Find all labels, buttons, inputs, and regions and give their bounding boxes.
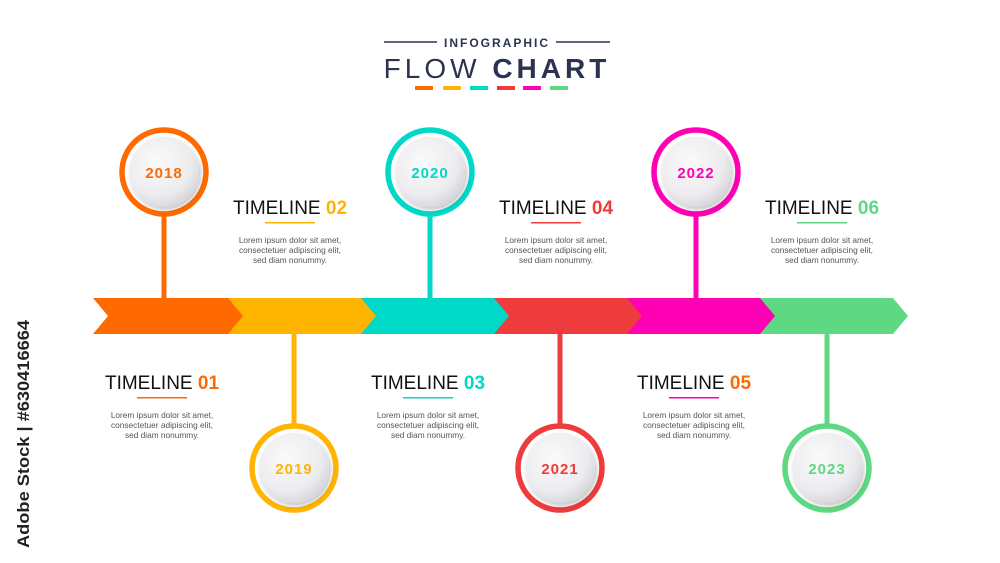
text: timeline 06: sed diam nonummy.	[785, 255, 859, 265]
text: timeline 06: Lorem ipsum dolor sit amet,	[771, 235, 873, 245]
text: timeline 04	[499, 198, 613, 265]
title: INFOGRAPHIC	[444, 36, 550, 50]
text: timeline 04: Lorem ipsum dolor sit amet,	[505, 235, 607, 245]
circle: 2021: 2021	[541, 461, 579, 478]
text: timeline 04: sed diam nonummy.	[519, 255, 593, 265]
circle: 2019	[252, 426, 336, 510]
circle: 2020	[388, 130, 472, 214]
circle: 2019: 2019	[275, 461, 313, 478]
text: timeline 02: consectetuer adipiscing elit,	[239, 245, 341, 255]
text: timeline 02: TIMELINE 02	[233, 198, 347, 219]
circle: 2021	[518, 426, 602, 510]
text: timeline 03	[371, 373, 485, 440]
circle: 2018	[122, 130, 206, 214]
text: timeline 05: sed diam nonummy.	[657, 430, 731, 440]
text: timeline 02: sed diam nonummy.	[253, 255, 327, 265]
text: timeline 05	[637, 373, 751, 440]
text: timeline 05: consectetuer adipiscing elit,	[643, 420, 745, 430]
text: timeline 05: Lorem ipsum dolor sit amet,	[643, 410, 745, 420]
circle: 2018: 2018	[145, 165, 183, 182]
text: timeline 03: Lorem ipsum dolor sit amet,	[377, 410, 479, 420]
circle: 2023: 2023	[808, 461, 846, 478]
text: timeline 01: consectetuer adipiscing elit,	[111, 420, 213, 430]
text: timeline 06: consectetuer adipiscing elit,	[771, 245, 873, 255]
text: timeline 05: TIMELINE 05	[637, 373, 751, 394]
text: timeline 04: TIMELINE 04	[499, 198, 613, 219]
text: timeline 01: sed diam nonummy.	[125, 430, 199, 440]
text: timeline 01	[105, 373, 219, 440]
text: timeline 01: Lorem ipsum dolor sit amet,	[111, 410, 213, 420]
text: timeline 01: TIMELINE 01	[105, 373, 219, 394]
text: timeline 02: Lorem ipsum dolor sit amet,	[239, 235, 341, 245]
circle: 2022: 2022	[677, 165, 715, 182]
circle: 2020: 2020	[411, 165, 449, 182]
text: timeline 03: consectetuer adipiscing elit,	[377, 420, 479, 430]
text: timeline 02	[233, 198, 347, 265]
text: timeline 06	[765, 198, 879, 265]
text: timeline 03: sed diam nonummy.	[391, 430, 465, 440]
arrow bar	[93, 298, 908, 334]
watermark id: Adobe Stock | #630416664	[14, 319, 33, 548]
text: timeline 06: TIMELINE 06	[765, 198, 879, 219]
text: timeline 04: consectetuer adipiscing elit,	[505, 245, 607, 255]
title	[384, 36, 610, 90]
circle: 2022	[654, 130, 738, 214]
title: FLOW CHART	[384, 53, 610, 84]
text: timeline 03: TIMELINE 03	[371, 373, 485, 394]
circle: 2023	[785, 426, 869, 510]
stems	[164, 210, 827, 430]
